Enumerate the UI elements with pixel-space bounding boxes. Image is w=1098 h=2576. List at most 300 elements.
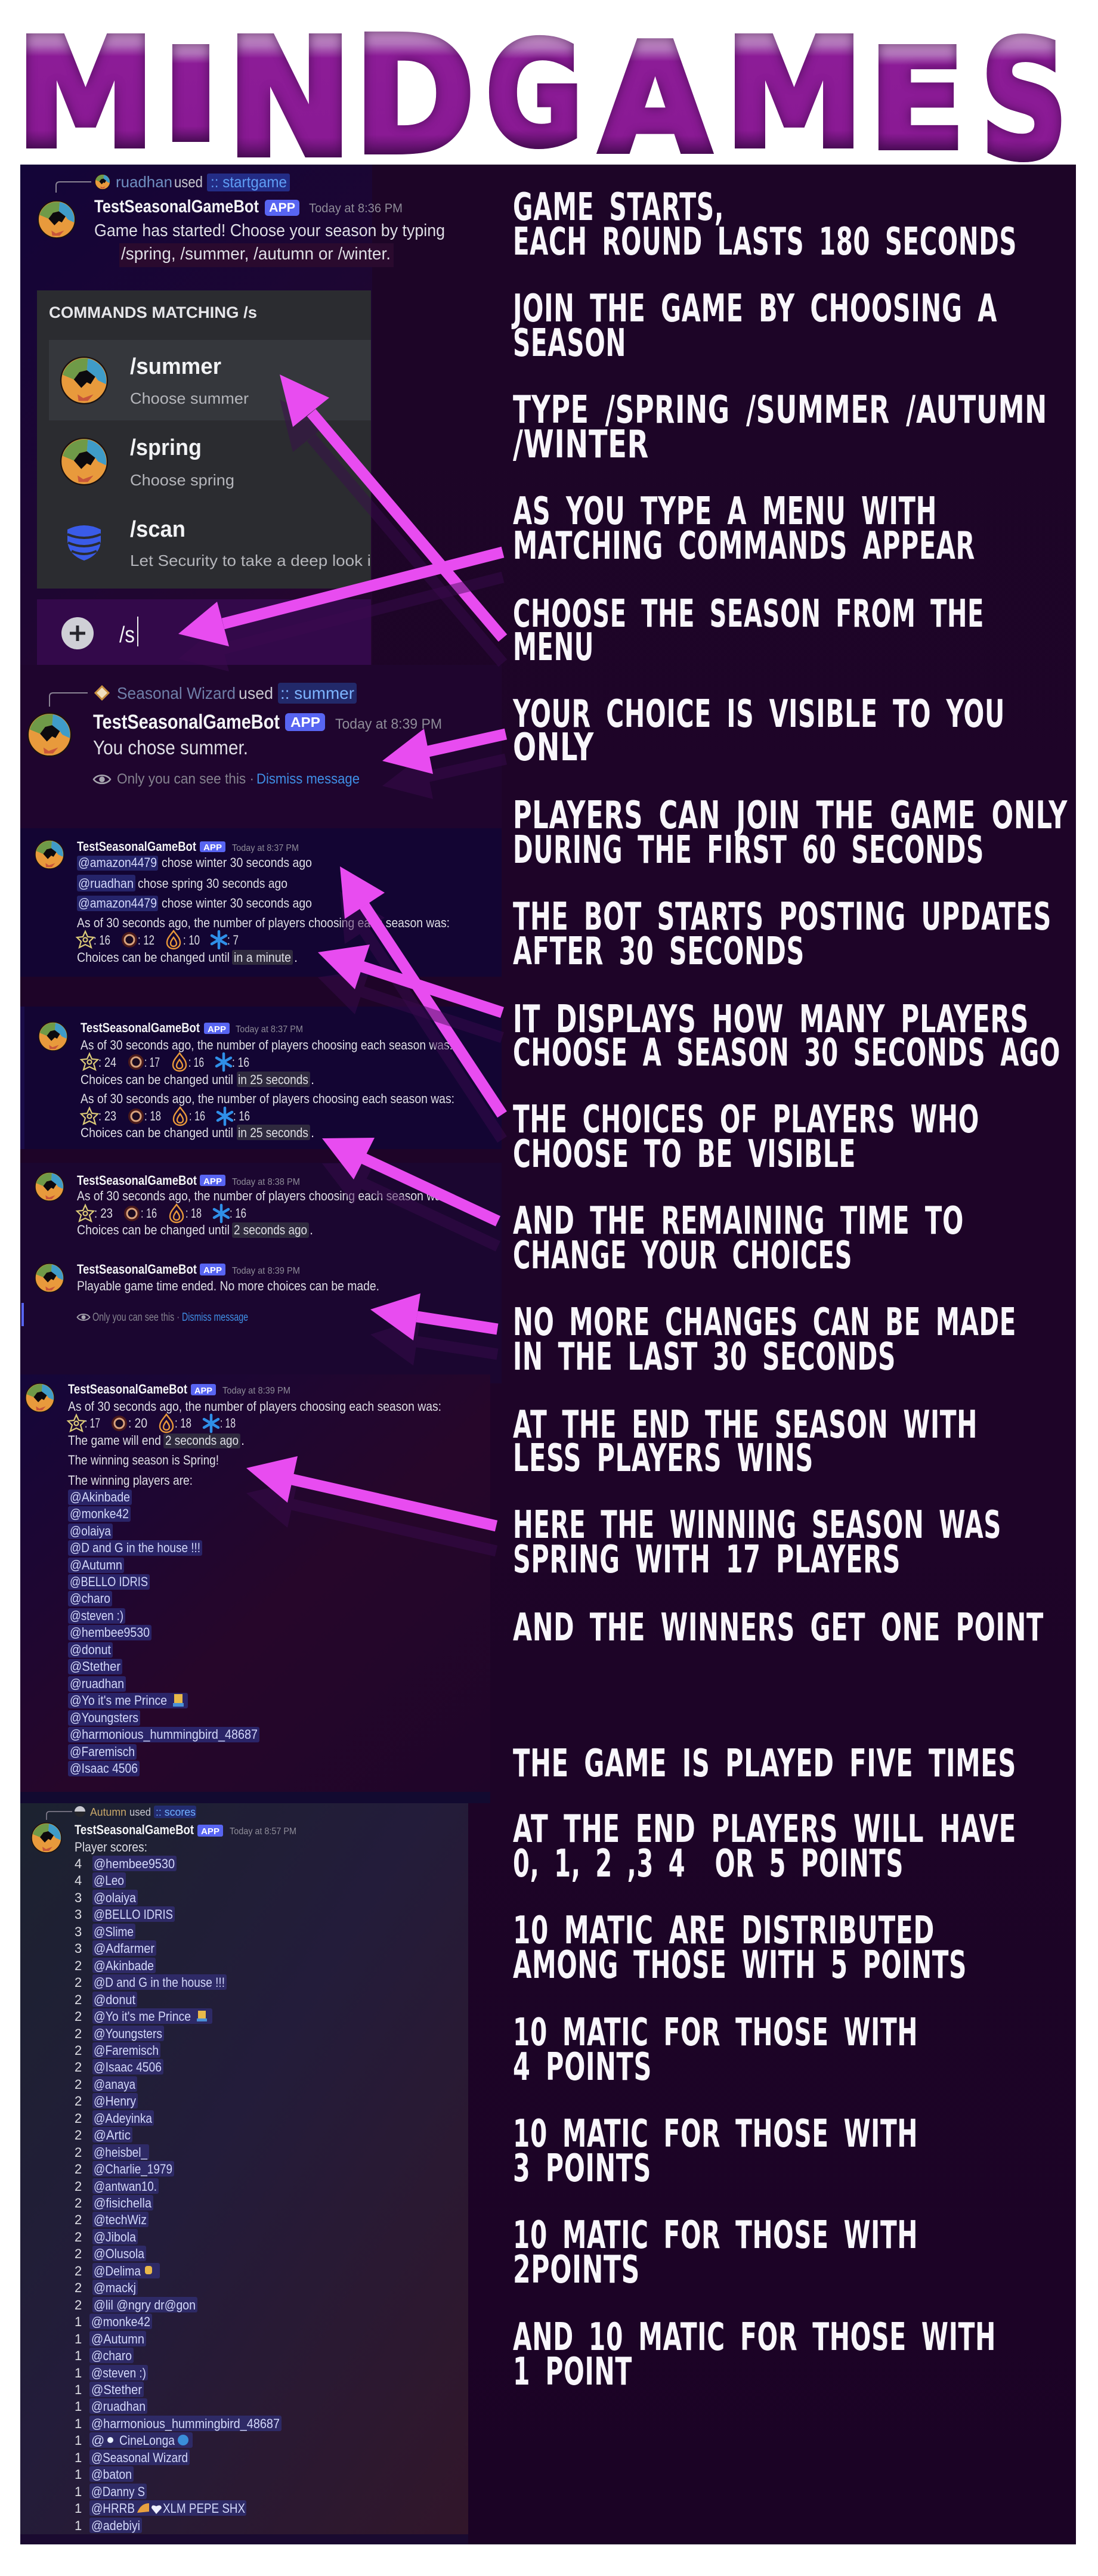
used startgame line: :: startgame bbox=[211, 173, 287, 191]
bot header: APP bbox=[194, 1386, 212, 1396]
scores list: @Olusola bbox=[94, 2246, 145, 2261]
panel: late update and game end bbox=[20, 1163, 502, 1383]
typed command: /s bbox=[119, 623, 135, 648]
time remaining: 2 seconds ago bbox=[234, 1222, 307, 1237]
reply connector bbox=[50, 693, 88, 707]
icon: bot avatar bbox=[26, 1383, 54, 1412]
season counts bbox=[81, 1053, 249, 1071]
bot header bbox=[68, 1382, 290, 1397]
scores list: @Slime bbox=[94, 1924, 134, 1939]
highlighted row: summer: /summer bbox=[130, 354, 221, 379]
menu heading: COMMANDS MATCHING /s bbox=[49, 304, 257, 321]
winners list: @D and G in the house !!! bbox=[70, 1540, 200, 1555]
season counts: : 16 bbox=[230, 1206, 246, 1221]
title: MINDGAMES: N bbox=[227, 4, 352, 193]
title: MINDGAMES: S bbox=[981, 8, 1068, 195]
arrow: to typed command bbox=[178, 552, 503, 671]
panel: commands menu bbox=[37, 290, 371, 589]
season counts: : 18 bbox=[220, 1416, 236, 1431]
scores list: 1 bbox=[75, 2348, 82, 2363]
bot header: APP bbox=[201, 1826, 219, 1837]
scores list: @BELLO IDRIS bbox=[94, 1907, 173, 1922]
scores list: @ bbox=[91, 2433, 104, 2448]
scores list: @steven :) bbox=[91, 2366, 146, 2380]
text block: choice visibility bbox=[512, 692, 1005, 770]
time remaining: Choices can be changed until bbox=[77, 950, 230, 965]
panel: game start screenshot bbox=[20, 165, 445, 665]
scores list: 4 bbox=[75, 1873, 82, 1888]
scores list: 2 bbox=[75, 2179, 82, 2194]
scores list: 2 bbox=[75, 2060, 82, 2075]
arrow: to season counts bbox=[318, 945, 502, 1038]
winners list: @charo bbox=[70, 1591, 110, 1606]
only you can see this: Only you can see this · bbox=[92, 1311, 180, 1324]
bot header: TestSeasonalGameBot bbox=[77, 1262, 197, 1277]
panel: ephemeral choice message bbox=[20, 665, 502, 828]
title: MINDGAMES: D bbox=[354, 4, 475, 189]
used summer line: used bbox=[239, 684, 273, 702]
scores list: @Adeyinka bbox=[94, 2111, 153, 2126]
scores list: 2 bbox=[75, 2043, 82, 2058]
icon: bot avatar bbox=[35, 840, 64, 869]
scores list: 1 bbox=[75, 2399, 82, 2414]
player choice 2 bbox=[77, 875, 287, 891]
time remaining: in 25 seconds bbox=[238, 1072, 308, 1087]
text block: visible choices: CHOOSE TO BE VISIBLE bbox=[513, 1132, 856, 1176]
text block: player counts bbox=[513, 998, 1060, 1075]
scores list: 1 bbox=[75, 2314, 82, 2329]
app badge: APP bbox=[269, 201, 295, 215]
season counts: : 17 bbox=[85, 1416, 100, 1431]
season counts: : 23 bbox=[98, 1109, 116, 1123]
player choice 2: @ruadhan bbox=[78, 876, 134, 891]
scores list: 2 bbox=[75, 1958, 82, 1973]
text block: join window bbox=[513, 794, 1068, 872]
winners list: @Stether bbox=[70, 1659, 120, 1674]
scores list: CineLonga bbox=[119, 2433, 175, 2448]
panel: winning players bbox=[20, 1374, 490, 1792]
arrow: to remaining time bbox=[322, 1138, 498, 1246]
scores list: 3 bbox=[75, 1941, 82, 1956]
winners list: @Faremisch bbox=[70, 1744, 135, 1759]
player choice 2: chose spring 30 seconds ago bbox=[138, 876, 287, 891]
bot header: TestSeasonalGameBot bbox=[68, 1382, 188, 1397]
season counts bbox=[68, 1414, 236, 1432]
winners list: @ruadhan bbox=[70, 1676, 124, 1691]
bot header: Today at 8:37 PM bbox=[236, 1024, 303, 1035]
message: You chose summer. bbox=[93, 736, 248, 758]
winners list: @Isaac 4506 bbox=[70, 1761, 138, 1776]
text block: three points prize bbox=[513, 2112, 918, 2191]
icon: small avatar bbox=[95, 174, 110, 190]
season counts: : 18 bbox=[175, 1416, 191, 1431]
scores list: 2 bbox=[75, 1975, 82, 1990]
season counts: : 18 bbox=[185, 1206, 202, 1221]
scores list: @fisichella bbox=[94, 2196, 152, 2210]
scores list: 2 bbox=[75, 2094, 82, 2109]
scores list: 1 bbox=[75, 2450, 82, 2465]
winners list: @Akinbade bbox=[70, 1490, 130, 1504]
time remaining: Choices can be changed until bbox=[81, 1125, 233, 1140]
scores list: @antwan10. bbox=[94, 2179, 157, 2194]
time remaining: . bbox=[311, 1125, 314, 1140]
scores list bbox=[75, 1856, 282, 2533]
only you can see this: Dismiss message bbox=[256, 771, 360, 787]
season count intro repeated: As of 30 seconds ago, the number of players choosing each season was: bbox=[81, 1091, 454, 1106]
bot header bbox=[77, 839, 299, 854]
scores list: 2 bbox=[75, 1992, 82, 2007]
bot header: Today at 8:57 PM bbox=[230, 1826, 296, 1837]
arrow: to game ended bbox=[370, 1293, 497, 1366]
time remaining: Choices can be changed until bbox=[81, 1072, 233, 1087]
text block: type the command: /WINTER bbox=[513, 423, 649, 467]
scores list: @Danny S bbox=[91, 2484, 145, 2499]
bot header: Today at 8:37 PM bbox=[232, 843, 299, 853]
only you can see this bbox=[78, 1311, 248, 1324]
bot header: TestSeasonalGameBot bbox=[75, 1822, 194, 1837]
scores list: 1 bbox=[75, 2501, 82, 2516]
scores list: 1 bbox=[75, 2518, 82, 2533]
season counts: : 17 bbox=[144, 1055, 160, 1070]
icon: bot avatar bbox=[32, 1823, 61, 1853]
text block: winning example: SPRING WITH 17 PLAYERS bbox=[513, 1538, 901, 1582]
season counts: : 16 bbox=[232, 1055, 249, 1070]
arrow: to only-you message bbox=[382, 729, 506, 799]
scores list: @Jibola bbox=[94, 2230, 137, 2244]
season counts: : 7 bbox=[227, 933, 239, 948]
text block: three points prize: 3 POINTS bbox=[513, 2147, 651, 2191]
bot header bbox=[81, 1020, 303, 1035]
scores list: 2 bbox=[75, 2246, 82, 2261]
player choice 1 bbox=[77, 855, 312, 871]
bot header: APP bbox=[203, 1265, 222, 1275]
row: spring: Choose spring bbox=[130, 471, 234, 489]
season counts bbox=[81, 1107, 250, 1125]
game ended message: Playable game time ended. No more choices can be made. bbox=[77, 1278, 379, 1293]
scores list: 1 bbox=[75, 2332, 82, 2346]
text block: winning example bbox=[513, 1503, 1001, 1582]
text block: bot updates bbox=[513, 895, 1051, 974]
scores list: @Delima bbox=[94, 2264, 141, 2278]
bot header: Today at 8:39 PM bbox=[222, 1386, 290, 1396]
text block: final points bbox=[513, 1807, 1016, 1886]
text block: game starts: GAME STARTS, bbox=[513, 185, 724, 230]
arrow: to winning season bbox=[246, 1456, 496, 1551]
panel: player scores bbox=[20, 1803, 468, 2544]
game end time: 2 seconds ago bbox=[165, 1433, 239, 1448]
text block: five points prize bbox=[513, 1909, 967, 1987]
scores list: @Akinbade bbox=[94, 1958, 154, 1973]
reply connector bbox=[56, 182, 91, 193]
used scores line bbox=[90, 1806, 196, 1818]
used startgame line: used bbox=[174, 173, 203, 191]
scores list: @hembee9530 bbox=[94, 1856, 175, 1871]
used scores line: Autumn bbox=[90, 1806, 126, 1818]
scores list: @Isaac 4506 bbox=[94, 2060, 162, 2075]
bot name: TestSeasonalGameBot bbox=[94, 197, 259, 216]
season counts: : 18 bbox=[144, 1109, 161, 1123]
icon: bot avatar bbox=[35, 1172, 64, 1201]
scores list: @Youngsters bbox=[94, 2026, 162, 2041]
scores list: 2 bbox=[75, 2009, 82, 2024]
time remaining: in 25 seconds bbox=[238, 1125, 308, 1140]
row: scan: /scan bbox=[130, 517, 185, 542]
icon: plus button bbox=[61, 617, 94, 649]
row: scan: Let Security to take a deep look i bbox=[130, 552, 371, 569]
row: scan bbox=[67, 517, 371, 569]
row: spring bbox=[61, 435, 234, 489]
used scores line: :: scores bbox=[156, 1806, 196, 1818]
bot header: Today at 8:39 PM bbox=[232, 1266, 300, 1276]
season counts: : 23 bbox=[94, 1206, 113, 1221]
season counts: : 16 bbox=[233, 1109, 250, 1123]
scores list: @techWiz bbox=[94, 2212, 147, 2227]
scores list: 2 bbox=[75, 2128, 82, 2142]
scores list: @D and G in the house !!! bbox=[94, 1975, 225, 1990]
scores list: @HRRB bbox=[91, 2501, 135, 2516]
season counts: : 16 bbox=[94, 933, 110, 948]
text block: winning rule bbox=[513, 1403, 978, 1481]
scores list: 1 bbox=[75, 2416, 82, 2431]
time remaining: . bbox=[294, 950, 298, 965]
only you can see this: Only you can see this · bbox=[117, 771, 254, 787]
used startgame line: ruadhan bbox=[116, 173, 172, 191]
game end time bbox=[68, 1433, 245, 1448]
scores list: @Charlie_1979 bbox=[94, 2162, 172, 2176]
scores list: @ruadhan bbox=[91, 2399, 146, 2414]
winners list: @Yo it's me Prince bbox=[70, 1693, 167, 1708]
text block: remaining time bbox=[513, 1199, 964, 1278]
bot header bbox=[75, 1822, 296, 1837]
title: MINDGAMES: I bbox=[160, 21, 221, 169]
scores list: 2 bbox=[75, 2145, 82, 2160]
timestamp: Today at 8:39 PM bbox=[335, 716, 442, 732]
icon: wizard diamond bbox=[95, 686, 109, 699]
highlighted row: summer bbox=[49, 340, 371, 420]
message line 2: /spring, /summer, /autumn or /winter. bbox=[121, 244, 391, 264]
season counts bbox=[77, 931, 239, 949]
app badge bbox=[285, 713, 325, 731]
scores list: 4 bbox=[75, 1856, 82, 1871]
scores list: @Autumn bbox=[91, 2332, 144, 2346]
bot header: APP bbox=[203, 1176, 222, 1187]
highlighted row: summer: Choose summer bbox=[130, 389, 249, 407]
scores list: @Seasonal Wizard bbox=[91, 2450, 188, 2465]
bot name: TestSeasonalGameBot bbox=[93, 711, 280, 733]
player choice 3: @amazon4479 bbox=[78, 896, 157, 911]
scores list: @anaya bbox=[94, 2077, 136, 2092]
text block: four points prize bbox=[513, 2011, 918, 2089]
scores list: 2 bbox=[75, 2280, 82, 2295]
scores list: @baton bbox=[91, 2467, 132, 2482]
arrow: to summer menu row bbox=[280, 374, 503, 663]
scores list: 2 bbox=[75, 2212, 82, 2227]
bot header: TestSeasonalGameBot bbox=[77, 839, 197, 854]
season count intro: As of 30 seconds ago, the number of players choosing each season was: bbox=[81, 1038, 453, 1052]
scores list: 1 bbox=[75, 2366, 82, 2380]
title: MINDGAMES: G bbox=[485, 12, 583, 178]
text block: remaining time: CHANGE YOUR CHOICES bbox=[513, 1234, 852, 1278]
season counts: : 16 bbox=[141, 1206, 157, 1221]
time remaining: . bbox=[310, 1222, 313, 1237]
winners list: @hembee9530 bbox=[70, 1625, 150, 1640]
season counts: : 16 bbox=[189, 1109, 205, 1123]
used summer line: :: summer bbox=[280, 684, 354, 702]
player choice 3 bbox=[77, 896, 312, 911]
scores heading: Player scores: bbox=[75, 1840, 147, 1854]
scores list: 3 bbox=[75, 1924, 82, 1939]
winners list: @Youngsters bbox=[70, 1710, 138, 1725]
player choice 3: chose winter 30 seconds ago bbox=[162, 896, 312, 911]
title: MINDGAMES: E bbox=[868, 20, 966, 181]
only you can see this: Dismiss message bbox=[182, 1311, 248, 1324]
text block: type the command bbox=[513, 388, 1047, 467]
season count intro: As of 30 seconds ago, the number of players choosing each season was: bbox=[77, 915, 450, 930]
game end time: The game will end bbox=[68, 1433, 161, 1448]
scores list: @Faremisch bbox=[94, 2043, 159, 2058]
scores list: @heisbel_ bbox=[94, 2145, 148, 2160]
scores list: 3 bbox=[75, 1907, 82, 1922]
winners list: @monke42 bbox=[70, 1506, 129, 1521]
scores list: @donut bbox=[94, 1992, 135, 2007]
season count intro: As of 30 seconds ago, the number of players choosing each season was: bbox=[68, 1399, 441, 1414]
text block: winning rule: LESS PLAYERS WINS bbox=[513, 1436, 814, 1481]
winners list: @harmonious_hummingbird_48687 bbox=[70, 1727, 258, 1742]
winners heading: The winning players are: bbox=[68, 1473, 193, 1488]
app badge bbox=[265, 200, 299, 216]
title: MINDGAMES: M bbox=[725, 7, 864, 181]
game end time: . bbox=[241, 1433, 245, 1448]
text block: four points prize: 4 POINTS bbox=[513, 2045, 652, 2089]
scores list: 1 bbox=[75, 2433, 82, 2448]
season counts: : 10 bbox=[183, 933, 200, 948]
text block: visible choices bbox=[513, 1098, 979, 1176]
scores list: 1 bbox=[75, 2467, 82, 2482]
scores list: @olaiya bbox=[94, 1890, 137, 1905]
bot header bbox=[77, 1262, 300, 1277]
row: spring: /spring bbox=[130, 435, 202, 460]
panel: second bot update bbox=[20, 1007, 502, 1149]
accent bar bbox=[21, 1303, 24, 1326]
scores list: @charo bbox=[91, 2348, 132, 2363]
scores list: 1 bbox=[75, 2382, 82, 2397]
bot header: APP bbox=[208, 1024, 226, 1035]
player choice 1: @amazon4479 bbox=[78, 855, 157, 870]
scores list: @lil @ngry dr@gon bbox=[94, 2298, 196, 2312]
scores list: 2 bbox=[75, 2077, 82, 2092]
text block: bot updates: AFTER 30 SECONDS bbox=[513, 930, 805, 974]
scores list: XLM PEPE SHX bbox=[163, 2501, 245, 2516]
reply connector bbox=[47, 1812, 72, 1820]
text block: two points prize bbox=[513, 2213, 918, 2292]
scores list: 2 bbox=[75, 2196, 82, 2210]
scores list: 2 bbox=[75, 2162, 82, 2176]
scores list: @mackj bbox=[94, 2280, 136, 2295]
input bar bbox=[37, 599, 371, 665]
scores list: @Stether bbox=[91, 2382, 142, 2397]
text block: join the game: SEASON bbox=[513, 321, 626, 366]
winners list: @BELLO IDRIS bbox=[70, 1574, 148, 1589]
text block: game starts bbox=[513, 185, 1017, 264]
winners list: @Autumn bbox=[70, 1558, 122, 1572]
used summer line: Seasonal Wizard bbox=[117, 684, 236, 702]
scores list: 2 bbox=[75, 2264, 82, 2278]
title: MINDGAMES: M bbox=[16, 7, 155, 181]
icon: small avatar bbox=[75, 1806, 85, 1817]
text block: one point prize bbox=[513, 2315, 996, 2394]
text block: choose from menu bbox=[513, 592, 984, 670]
winners list bbox=[68, 1490, 259, 1776]
scores list: @Yo it's me Prince bbox=[94, 2009, 191, 2024]
title: MINDGAMES bbox=[16, 4, 1068, 195]
bot header: APP bbox=[203, 843, 222, 853]
icon: bot avatar bbox=[28, 713, 71, 756]
winners list: @donut bbox=[70, 1642, 111, 1657]
season counts: : 24 bbox=[98, 1055, 116, 1070]
time remaining: in a minute bbox=[234, 950, 291, 965]
scores list: @harmonious_hummingbird_48687 bbox=[91, 2416, 280, 2431]
icon: bot avatar bbox=[38, 201, 75, 238]
scores list: 2 bbox=[75, 2111, 82, 2126]
text block: choice visibility: ONLY bbox=[513, 726, 594, 770]
player choice 1: chose winter 30 seconds ago bbox=[162, 855, 312, 870]
scores list: @Leo bbox=[94, 1873, 124, 1888]
text block: choose from menu: MENU bbox=[513, 626, 594, 670]
scores list: @Henry bbox=[94, 2094, 136, 2109]
message line 1: Game has started! Choose your season by typing bbox=[94, 221, 445, 240]
time remaining: . bbox=[311, 1072, 314, 1087]
icon: bot avatar bbox=[39, 1022, 67, 1051]
scores list: 2 bbox=[75, 2230, 82, 2244]
time remaining: Choices can be changed until bbox=[77, 1222, 230, 1237]
bot header: TestSeasonalGameBot bbox=[77, 1173, 197, 1188]
winning season: The winning season is Spring! bbox=[68, 1453, 219, 1467]
icon: bot avatar bbox=[35, 1264, 64, 1292]
title: MINDGAMES: A bbox=[600, 13, 710, 187]
text block: two points prize: 2POINTS bbox=[513, 2248, 640, 2292]
used startgame line bbox=[116, 173, 290, 191]
arrow: to visible player choices bbox=[340, 866, 502, 1140]
app badge: APP bbox=[290, 714, 320, 730]
season counts: : 12 bbox=[138, 933, 154, 948]
season count intro: As of 30 seconds ago, the number of players choosing each season was: bbox=[77, 1188, 450, 1203]
season counts: : 20 bbox=[128, 1416, 147, 1431]
scores list: @Adfarmer bbox=[94, 1941, 154, 1956]
scores list: @Artic bbox=[94, 2128, 131, 2142]
scores list: 2 bbox=[75, 2298, 82, 2312]
scores list: @adebiyi bbox=[91, 2518, 140, 2533]
panel: first bot update bbox=[20, 828, 502, 977]
used summer line bbox=[117, 683, 357, 704]
text block: one point prize: 1 POINT bbox=[513, 2350, 632, 2394]
bot header: Today at 8:38 PM bbox=[232, 1177, 300, 1187]
text block: no more changes bbox=[513, 1301, 1016, 1379]
text block: join the game bbox=[511, 287, 997, 366]
scores list: 1 bbox=[75, 2484, 82, 2499]
winners list: @steven :) bbox=[70, 1608, 123, 1623]
text block: matching menu bbox=[513, 490, 975, 568]
timestamp: Today at 8:36 PM bbox=[309, 202, 403, 215]
season counts bbox=[77, 1205, 246, 1222]
bot header: TestSeasonalGameBot bbox=[81, 1020, 200, 1035]
scores list: 3 bbox=[75, 1890, 82, 1905]
season counts: : 16 bbox=[188, 1055, 204, 1070]
winners list: @olaiya bbox=[70, 1524, 112, 1538]
only you can see this bbox=[94, 771, 360, 787]
scores list: @monke42 bbox=[91, 2314, 150, 2329]
band above scores bbox=[20, 1792, 490, 1803]
scores list: 2 bbox=[75, 2026, 82, 2041]
